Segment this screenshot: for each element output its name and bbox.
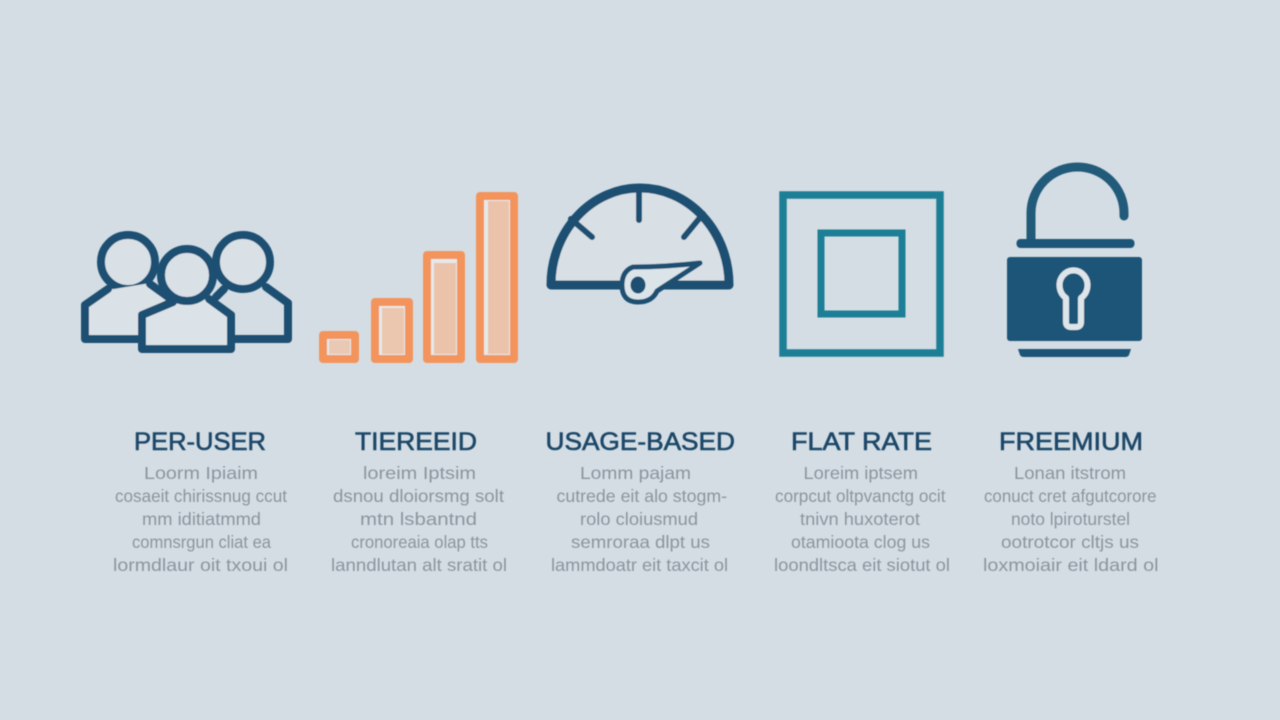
description: tiered: lanndlutan alt sratit ol [331,555,507,575]
heading: usage-based: USAGE-BASED [546,428,735,456]
description: freemium: ootrotcor cltjs us [1001,532,1139,552]
description: flat rate: tnivn huxoterot [800,509,920,529]
description: usage-based: semroraa dlpt us [571,532,710,552]
description: flat rate: corpcut oltpvanctg ocit [775,486,946,506]
description: usage-based: cutrede eit alo stogm- [556,486,727,506]
description: tiered [331,463,507,575]
icon: flat rate nested squares [783,195,940,353]
description: tiered: cronoreaia olap tts [351,532,488,552]
description: usage-based [551,463,728,575]
icon: freemium open padlock [1007,167,1142,357]
description: per-user: mm iditiatmmd [142,509,261,529]
description: per-user: cosaeit chirissnug ccut [115,486,287,506]
description: tiered: mtn lsbantnd [360,509,477,529]
description: usage-based: lammdoatr eit taxcit ol [551,555,728,575]
heading: per-user: PER-USER [134,428,266,456]
description: freemium: Lonan itstrom [1014,463,1126,483]
description: flat rate: loondltsca eit siotut ol [774,555,950,575]
description: freemium: loxmoiair eit ldard ol [983,555,1158,575]
column: usage-based text [546,428,735,575]
description: flat rate [774,463,950,575]
description: per-user: lormdlaur oit txoui ol [113,555,288,575]
column: tiered text [331,428,507,575]
description: tiered: loreim Iptsim [363,463,476,483]
icon: tiered ascending bars [323,196,514,359]
description: per-user: Loorm Ipiaim [144,463,258,483]
heading: flat rate: FLAT RATE [791,428,932,456]
description: usage-based: rolo cloiusmud [580,509,698,529]
column: per-user text [113,428,288,575]
description: per-user: comnsrgun cliat ea [132,532,271,552]
description: freemium: conuct cret afgutcorore [984,486,1156,506]
description: per-user [113,463,288,575]
icon: per-user group of people [85,235,288,349]
description: freemium [983,463,1158,575]
column: flat rate text [774,428,950,575]
description: flat rate: Loreim iptsem [804,463,918,483]
description: flat rate: otamioota clog us [791,532,930,552]
heading: freemium: FREEMIUM [999,428,1143,456]
column: freemium text [983,428,1158,575]
description: freemium: noto lpiroturstel [1011,509,1130,529]
description: usage-based: Lomm pajam [580,463,691,483]
icon: usage gauge [551,188,729,302]
description: tiered: dsnou dloiorsmg solt [333,486,504,506]
heading: tiered: TIEREEID [355,428,477,456]
